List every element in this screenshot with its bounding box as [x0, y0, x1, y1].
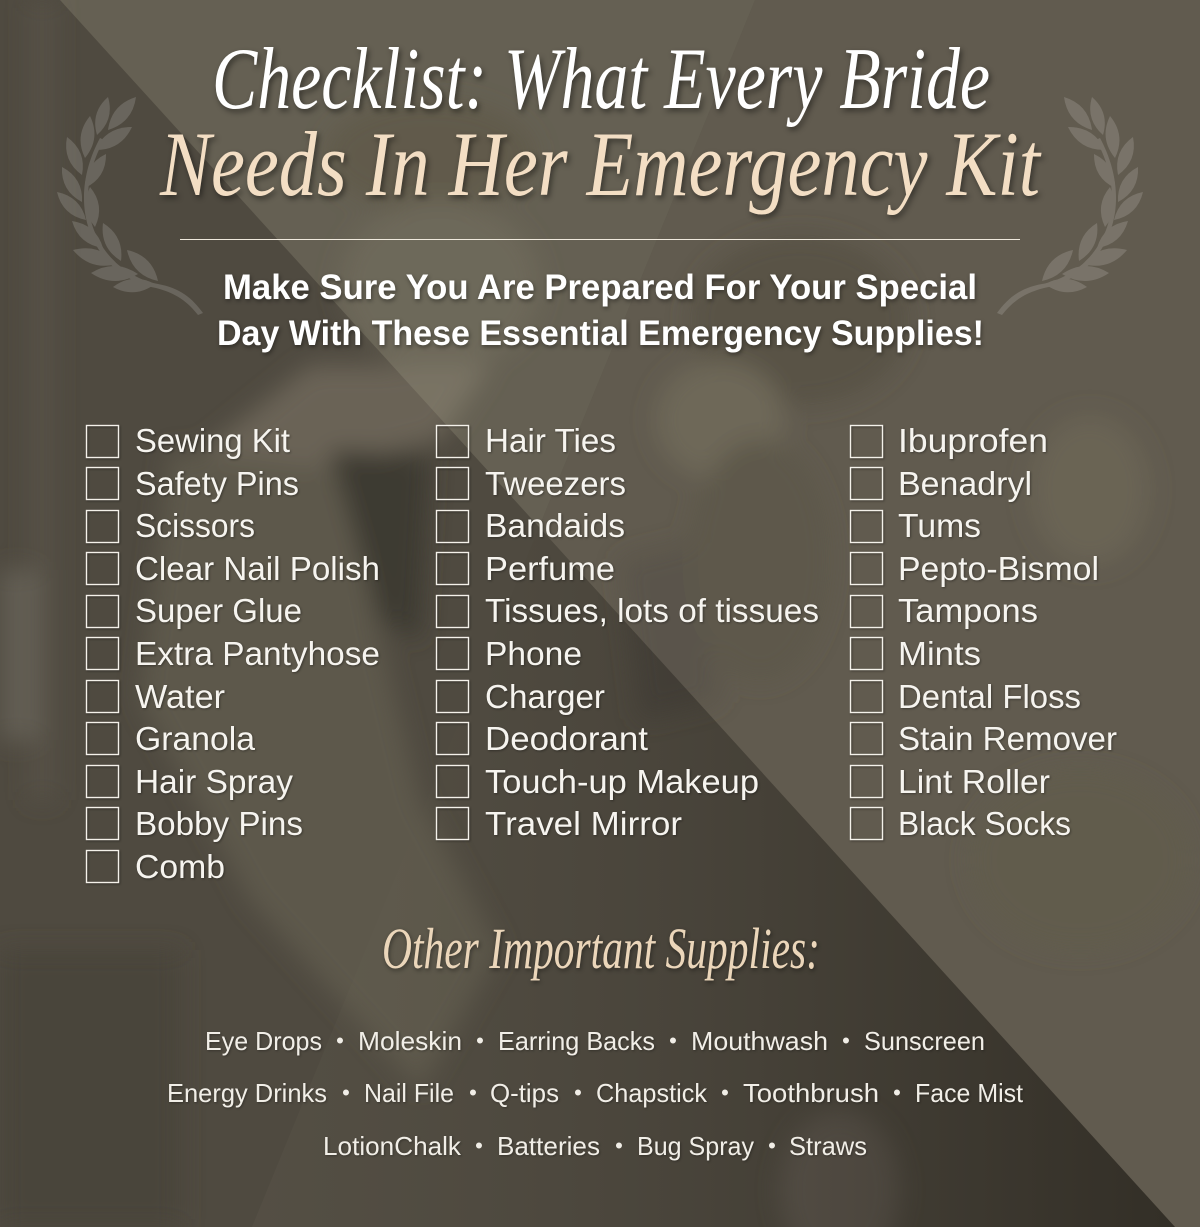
checklist: column 3: Pepto-Bismol	[898, 550, 1099, 587]
checklist: column 1: Clear Nail Polish	[135, 550, 380, 587]
other supplies list: Nail File	[364, 1078, 454, 1108]
other supplies list: Batteries	[497, 1131, 600, 1161]
title	[159, 31, 1042, 215]
checklist: column 2: Bandaids	[485, 507, 625, 544]
other supplies list: •	[768, 1133, 776, 1158]
checklist: column 1: Comb	[135, 848, 225, 885]
checklist: column 2: Perfume	[485, 550, 615, 587]
checklist: column 3: Stain Remover	[898, 720, 1117, 757]
heading: other important supplies: Other Important Supplies:	[382, 916, 820, 981]
checklist: column 2: Tissues, lots of tissues	[485, 592, 819, 629]
title: Checklist: What Every Bride	[212, 31, 990, 128]
other supplies list	[167, 1026, 1024, 1161]
checklist: column 3: Dental Floss	[898, 678, 1081, 715]
other supplies list: Mouthwash	[691, 1026, 828, 1056]
subtitle: Make Sure You Are Prepared For Your Special	[223, 268, 977, 307]
other supplies list: Face Mist	[915, 1078, 1024, 1108]
checklist: column 3	[850, 422, 1117, 842]
other supplies list: •	[615, 1133, 623, 1158]
other supplies list: Straws	[789, 1131, 867, 1161]
other supplies list: Sunscreen	[864, 1026, 985, 1056]
checklist: column 3: Benadryl	[898, 465, 1032, 502]
other supplies list: •	[574, 1080, 582, 1105]
other supplies list: •	[469, 1080, 477, 1105]
other supplies list: •	[475, 1133, 483, 1158]
checklist: column 3: Mints	[898, 635, 981, 672]
other supplies list: •	[476, 1028, 484, 1053]
laurel: left	[53, 93, 203, 315]
other supplies list: Q-tips	[490, 1078, 559, 1108]
checklist: column 2: Charger	[485, 678, 605, 715]
checklist: column 3: Ibuprofen	[898, 422, 1048, 459]
other supplies list: •	[842, 1028, 850, 1053]
other supplies list: Chapstick	[596, 1078, 708, 1108]
checklist: column 2: Hair Ties	[485, 422, 616, 459]
other supplies list: LotionChalk	[323, 1131, 462, 1161]
checklist: column 3: Lint Roller	[898, 763, 1050, 800]
checklist: column 2: Deodorant	[485, 720, 648, 757]
checklist: column 2: Tweezers	[485, 465, 626, 502]
checklist: column 1: Super Glue	[135, 592, 302, 629]
other supplies list: •	[336, 1028, 344, 1053]
checklist: column 2: Phone	[485, 635, 582, 672]
checklist: column 2	[436, 422, 819, 842]
checklist: column 2: Touch-up Makeup	[485, 763, 759, 800]
checklist: column 1: Granola	[135, 720, 256, 757]
checklist: column 3: Tums	[898, 507, 981, 544]
subtitle	[217, 268, 984, 353]
checklist: column 1: Safety Pins	[135, 465, 299, 502]
other supplies list: •	[721, 1080, 729, 1105]
checklist: column 1: Extra Pantyhose	[135, 635, 380, 672]
checklist: column 1: Hair Spray	[135, 763, 293, 800]
checklist: column 1	[86, 422, 380, 885]
other supplies list: Eye Drops	[205, 1026, 322, 1056]
checklist: column 1: Bobby Pins	[135, 805, 303, 842]
checklist: column 1: Scissors	[135, 507, 255, 544]
checklist: column 1: Water	[135, 678, 225, 715]
other supplies list: Earring Backs	[498, 1026, 655, 1056]
other supplies list: •	[669, 1028, 677, 1053]
checklist: column 2: Travel Mirror	[485, 805, 682, 842]
other supplies list: •	[342, 1080, 350, 1105]
other supplies list: Bug Spray	[637, 1131, 754, 1161]
laurel: right	[997, 93, 1147, 315]
other supplies list: •	[893, 1080, 901, 1105]
other supplies list: Moleskin	[358, 1026, 462, 1056]
other supplies list: Energy Drinks	[167, 1078, 327, 1108]
checklist: column 3: Black Socks	[898, 805, 1071, 842]
checklist: column 1: Sewing Kit	[135, 422, 290, 459]
checklist: column 3: Tampons	[898, 592, 1038, 629]
other supplies list: Toothbrush	[743, 1078, 879, 1108]
subtitle: Day With These Essential Emergency Supplies!	[217, 314, 984, 353]
title: Needs In Her Emergency Kit	[159, 113, 1042, 215]
